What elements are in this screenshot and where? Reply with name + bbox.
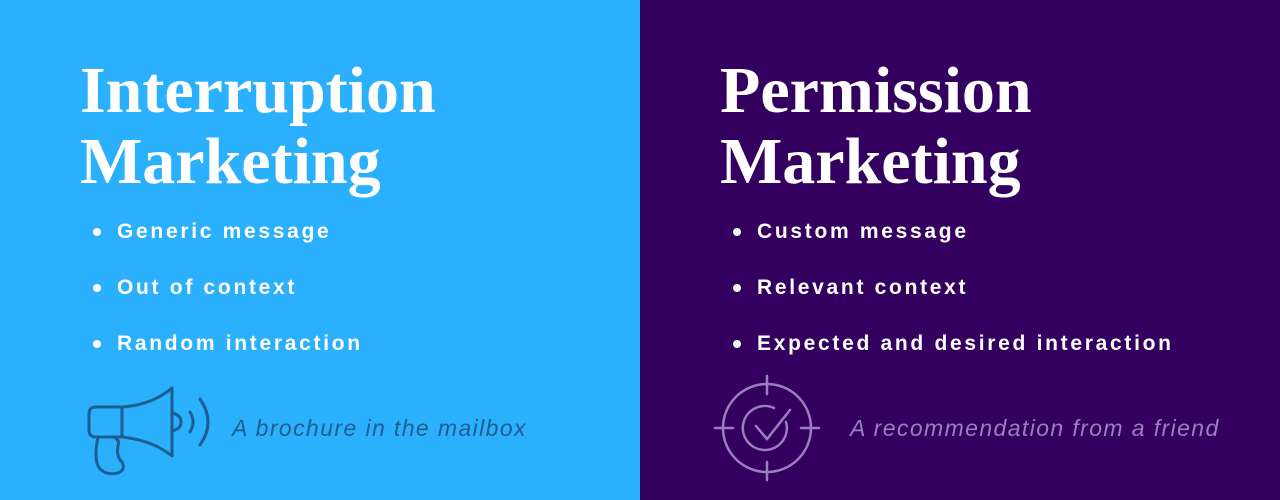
panel: permission marketing — [640, 0, 1280, 500]
bullet list — [733, 220, 1174, 355]
bullet list: Expected and desired interaction — [757, 332, 1174, 355]
title: Permission — [720, 54, 1032, 127]
panel: interruption marketing — [0, 0, 640, 500]
bullet list: Random interaction — [117, 332, 363, 355]
title — [720, 54, 1032, 198]
title: Marketing — [80, 125, 381, 198]
bullet list — [93, 220, 363, 355]
bullet list: Relevant context — [757, 276, 968, 299]
bullet list: Out of context — [117, 276, 297, 299]
bullet list: Custom message — [757, 220, 969, 243]
title: Marketing — [720, 125, 1021, 198]
title: Interruption — [80, 54, 436, 127]
caption: A brochure in the mailbox — [232, 415, 527, 441]
bullet list: Generic message — [117, 220, 331, 243]
icon: megaphone — [88, 386, 210, 476]
title — [80, 54, 436, 198]
icon: target check — [714, 374, 820, 482]
caption: A recommendation from a friend — [850, 415, 1220, 441]
